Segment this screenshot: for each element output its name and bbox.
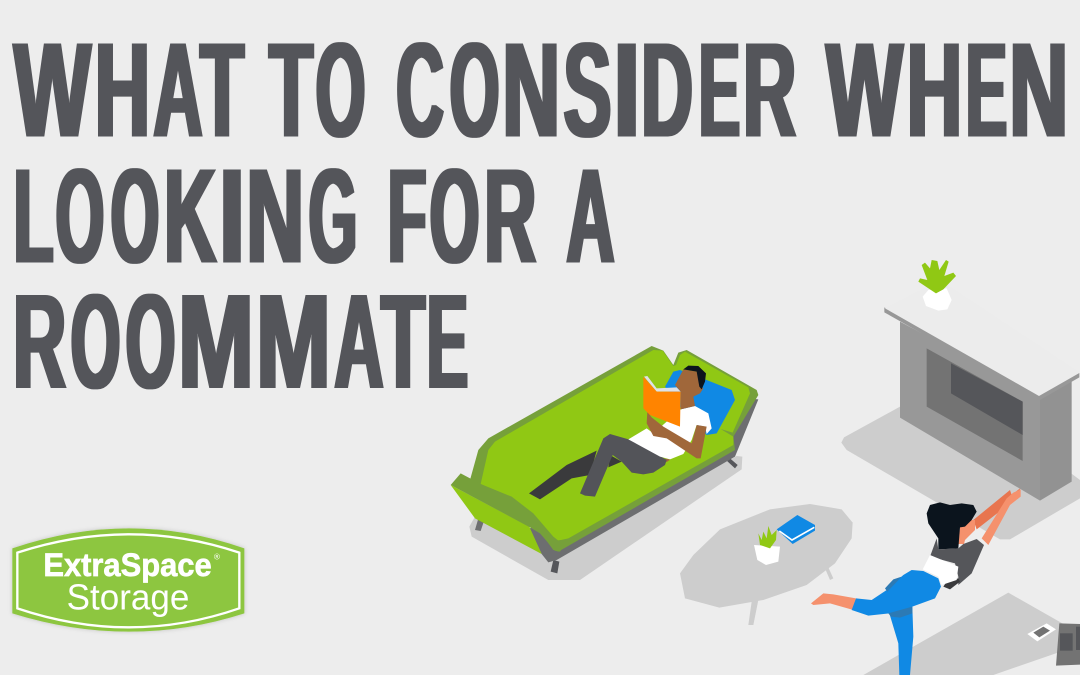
- title: O: [111, 140, 159, 292]
- title: O: [56, 140, 104, 292]
- illustration: coffee table with plant and book: [680, 504, 853, 625]
- title: E: [966, 14, 1007, 166]
- logo: Extra Space Storage: Storage: [67, 576, 189, 617]
- title: T: [381, 266, 425, 417]
- title: O: [71, 266, 120, 417]
- title: A: [566, 140, 614, 292]
- title: O: [316, 14, 365, 166]
- title: N: [246, 140, 304, 292]
- title: G: [309, 140, 357, 292]
- title: E: [699, 14, 740, 166]
- title: I: [613, 14, 640, 166]
- title: D: [641, 14, 693, 166]
- title: K: [164, 140, 216, 292]
- logo: Extra Space Storage: [12, 528, 244, 632]
- title: H: [95, 14, 150, 166]
- title: S: [564, 14, 611, 166]
- title: F: [388, 140, 426, 292]
- title: R: [13, 266, 66, 417]
- title: I: [219, 140, 245, 292]
- illustration: rug with phone and laptop: [863, 593, 1080, 675]
- illustration: fireplace with plant: [841, 260, 1080, 539]
- title: E: [427, 266, 468, 417]
- logo: Extra Space Storage: ®: [214, 552, 220, 561]
- title: H: [907, 14, 962, 166]
- title: A: [334, 266, 384, 417]
- title: W: [826, 14, 903, 166]
- title: R: [743, 14, 796, 166]
- title: O: [450, 14, 499, 166]
- title: N: [502, 14, 560, 166]
- logo: Extra Space Storage: ExtraSpace: [43, 546, 212, 583]
- title: R: [484, 140, 536, 292]
- illustration: woman stretching: [811, 488, 1021, 675]
- title: T: [200, 14, 244, 166]
- title: M: [178, 266, 254, 417]
- illustration: green sofa with man reading: [451, 346, 758, 580]
- title: W: [14, 14, 91, 166]
- title: C: [396, 14, 444, 166]
- title: T: [269, 14, 313, 166]
- title: [13, 14, 1068, 417]
- title: O: [430, 140, 479, 292]
- title: O: [126, 266, 175, 417]
- title: M: [256, 266, 331, 417]
- title: L: [14, 140, 53, 292]
- title: A: [154, 14, 202, 166]
